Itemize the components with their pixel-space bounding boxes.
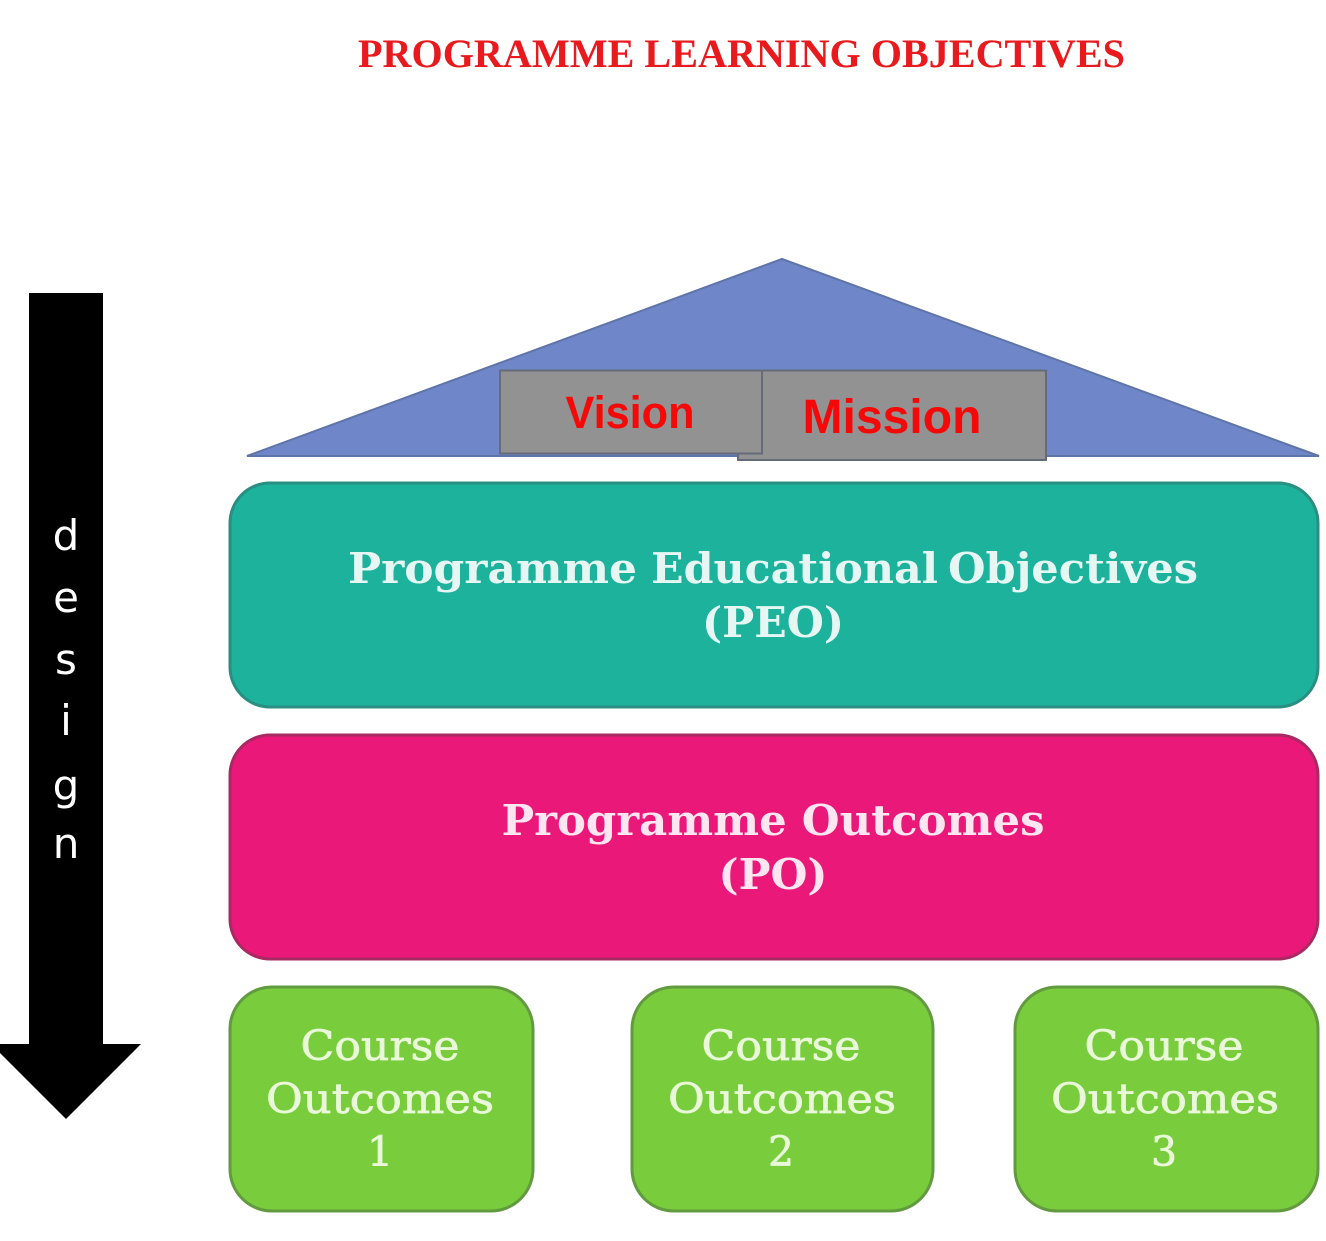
arrow: design direction xyxy=(0,293,141,1119)
panel: course outcomes 3 xyxy=(1015,987,1318,1211)
mission box: Mission xyxy=(802,391,982,444)
panel: course outcomes 1: Outcomes xyxy=(266,1075,494,1123)
arrow label: design: i xyxy=(60,696,72,745)
panel: course outcomes 3: Outcomes xyxy=(1051,1075,1279,1123)
arrow label: design: n xyxy=(53,819,79,868)
panel: programme educational objectives: Educational xyxy=(651,544,938,593)
panel: course outcomes 2 xyxy=(632,987,933,1211)
panel: course outcomes 2: Outcomes xyxy=(668,1075,896,1123)
panel: programme outcomes: (PO) xyxy=(718,850,828,899)
arrow label: design xyxy=(53,511,79,868)
panel: programme educational objectives: (PEO) xyxy=(702,598,844,647)
title: PROGRAMME LEARNING OBJECTIVES xyxy=(358,31,1125,76)
panel: programme educational objectives xyxy=(230,483,1318,707)
mission box xyxy=(738,370,1046,460)
vision box xyxy=(500,370,762,454)
panel: programme educational objectives: Programme xyxy=(348,544,637,593)
arrow label: design: d xyxy=(53,511,79,560)
arrow label: design: g xyxy=(53,761,79,810)
panel: programme outcomes: Programme Outcomes xyxy=(502,796,1044,845)
panel: programme educational objectives: Objectives xyxy=(948,544,1198,593)
arrow label: design: e xyxy=(53,573,79,622)
panel: course outcomes 2: 2 xyxy=(768,1128,794,1176)
vision box: Vision xyxy=(566,387,694,438)
panel: programme outcomes xyxy=(230,735,1318,959)
panel: course outcomes 2: Course xyxy=(702,1022,860,1070)
panel: course outcomes 1 xyxy=(230,987,533,1211)
roof triangle xyxy=(247,259,1319,456)
panel: course outcomes 3: Course xyxy=(1084,1022,1244,1070)
panel: course outcomes 1: Course xyxy=(300,1022,460,1070)
panel: course outcomes 1: 1 xyxy=(367,1128,393,1176)
arrow label: design: s xyxy=(55,635,77,684)
panel: course outcomes 3: 3 xyxy=(1151,1128,1177,1176)
